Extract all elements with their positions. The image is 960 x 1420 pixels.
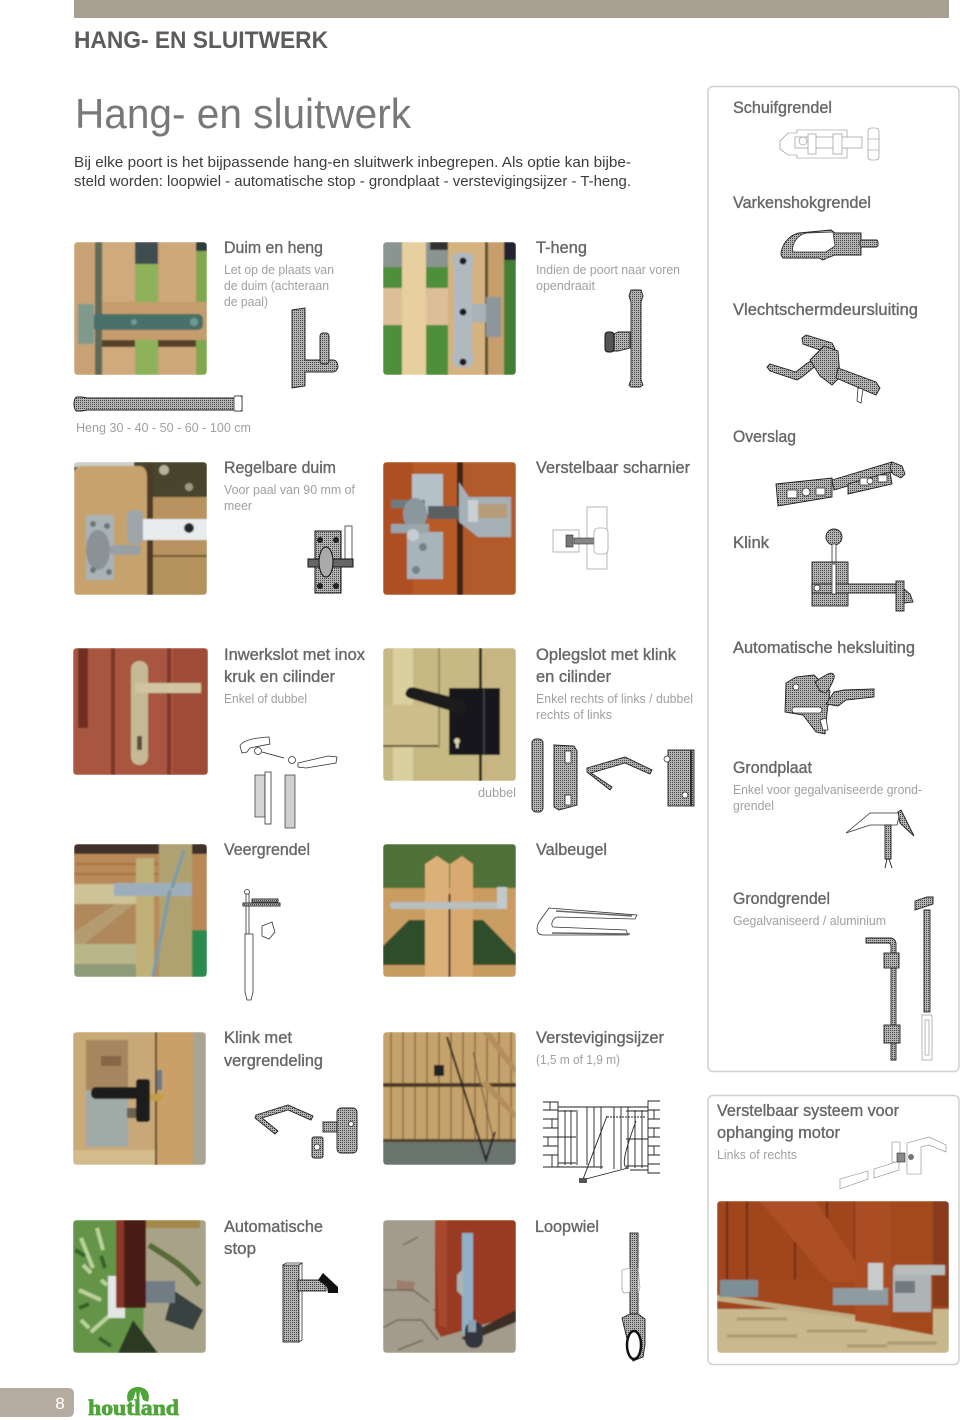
Grondplaat text [733,759,922,813]
Oplegslot text: en cilinder [536,668,611,686]
Varkenshokgrendel label: Varkenshokgrendel [733,194,871,212]
Regelbare duim text: Regelbare duim [224,459,336,477]
panel: verstelbaar systeem voor ophanging motor [708,1096,959,1364]
page number tab [0,1388,74,1417]
intro text: steld worden: loopwiel - automatische stop - grondplaat - verstevigingsijzer - T-heng. [74,173,631,190]
Regelbare duim text: meer [224,498,253,513]
Oplegslot text: Enkel rechts of links / dubbel [536,691,693,706]
motor panel text: ophanging motor [717,1124,840,1142]
Verstevigingsijzer text: (1,5 m of 1,9 m) [536,1052,620,1067]
icon: automatische stop [283,1263,338,1342]
icon: verstelbaar scharnier [553,507,608,569]
Veergrendel label: Veergrendel [224,841,310,859]
panel: grendels and sluitingen [708,86,959,1072]
Grondgrendel text: Grondgrendel [733,890,830,908]
Duim en heng text: Let op de plaats van [224,262,334,277]
Oplegslot text: rechts of links [536,707,612,722]
Heng caption: Heng 30 - 40 - 50 - 60 - 100 cm [76,420,251,435]
Oplegslot text: Oplegslot met klink [536,646,677,664]
Inwerkslot text [224,646,366,706]
icon: vlechtscherm deursluiting [767,335,880,403]
photo: T-heng [383,242,516,375]
icon: heng [74,396,242,411]
photo: klink met vergrendeling [73,1032,206,1165]
intro text: Bij elke poort is het bijpassende hang-en sluitwerk inbegrepen. Als optie kan bijbe- [74,154,631,171]
Loopwiel label: Loopwiel [535,1218,599,1236]
Regelbare duim text: Voor paal van 90 mm of [224,482,355,497]
icon: gate with brace [543,1101,660,1183]
Inwerkslot text: kruk en cilinder [224,668,336,686]
intro text [74,154,631,190]
icon: schuifgrendel [780,128,879,160]
main title: Hang- en sluitwerk [75,90,412,137]
Automatische heksluiting label: Automatische heksluiting [733,639,915,657]
T-heng text: T-heng [536,239,587,257]
Vlechtschermdeursluiting label: Vlechtschermdeursluiting [733,301,918,319]
section heading: HANG- EN SLUITWERK [74,27,329,54]
motor panel text [717,1102,899,1162]
Grondplaat text: grendel [733,798,774,813]
photo: valbeugel [383,844,516,977]
motor panel text: Verstelbaar systeem voor [717,1102,899,1120]
icon: grondgrendel [866,897,933,1060]
Verstelbaar scharnier label: Verstelbaar scharnier [536,459,690,477]
Automatische stop text: Automatische [224,1218,323,1236]
icon: oplegslot parts [532,739,694,812]
icon: regelbare duim [308,526,353,593]
photo: inwerkslot [73,648,208,775]
photo: loopwiel [383,1220,516,1353]
dubbel caption: dubbel [478,785,516,800]
Klink met vergrendeling text [224,1029,323,1070]
Duim en heng text [224,239,334,309]
photo: duim en heng [74,242,207,375]
Grondplaat text: Enkel voor gegalvaniseerde grond- [733,782,922,797]
icon: veergrendel [243,890,280,1000]
Klink label: Klink [733,534,770,552]
photo: oplegslot [383,648,516,781]
icon: klink [812,529,913,611]
Klink met vergrendeling text: vergrendeling [224,1052,323,1070]
Duim en heng text: de paal) [224,294,268,309]
icon: T-heng [605,290,643,387]
T-heng text: opendraait [536,278,595,293]
Grondplaat text: Grondplaat [733,759,812,777]
Duim en heng text: Duim en heng [224,239,323,257]
photo: verstevigingsijzer [383,1032,516,1165]
icon: valbeugel [537,908,637,935]
Automatische stop text [224,1218,323,1258]
Verstevigingsijzer text [536,1029,665,1067]
logo: houtland: houtland [88,1395,179,1420]
Oplegslot text [536,646,693,722]
icon: duim [292,308,338,388]
Overslag label: Overslag [733,428,796,446]
photo: gate with motor bracket [717,1201,949,1353]
icon: klink met vergrendeling [255,1105,357,1158]
motor panel text: Links of rechts [717,1147,797,1162]
icon: varkenshokgrendel [781,230,878,260]
photo: regelbare duim [74,462,207,595]
icon: inwerkslot [240,737,337,828]
T-heng text: Indien de poort naar voren [536,262,680,277]
Inwerkslot text: Inwerkslot met inox [224,646,366,664]
icon: motor bracket [840,1137,946,1189]
photo: automatische stop [73,1220,206,1353]
photo: verstelbaar scharnier [383,462,516,595]
header bar [74,0,949,18]
page number tab: 8 [55,1394,65,1413]
Grondgrendel text [733,890,886,928]
Valbeugel label: Valbeugel [536,841,607,859]
Inwerkslot text: Enkel of dubbel [224,691,307,706]
Schuifgrendel label: Schuifgrendel [733,99,832,117]
icon: heksluiting [785,673,874,734]
Regelbare duim text [224,459,355,513]
Duim en heng text: de duim (achteraan [224,278,329,293]
Klink met vergrendeling text: Klink met [224,1029,292,1047]
icon: grondplaat [846,810,914,868]
T-heng text [536,239,680,293]
photo: veergrendel [74,844,207,977]
Verstevigingsijzer text: Verstevigingsijzer [536,1029,665,1047]
icon: overslag [776,462,905,506]
Grondgrendel text: Gegalvaniseerd / aluminium [733,913,886,928]
Automatische stop text: stop [224,1240,256,1258]
icon: loopwiel [622,1233,645,1361]
